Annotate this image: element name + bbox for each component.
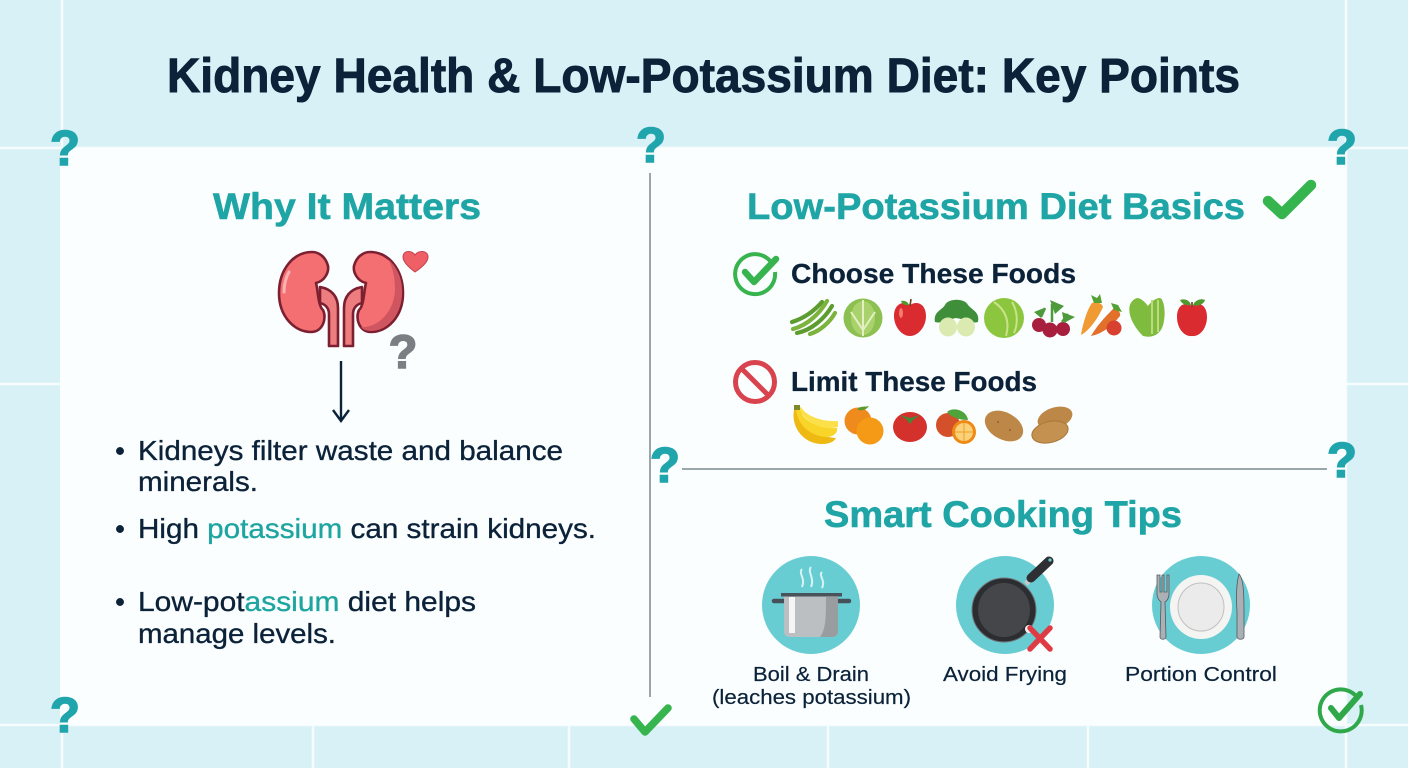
icon: large check <box>1268 185 1311 214</box>
icon: bottom center check <box>634 708 668 732</box>
icon: bottom right circled check <box>1320 689 1362 731</box>
icon: boiling pot <box>762 556 860 654</box>
icon: potato <box>980 404 1028 448</box>
horizontal divider <box>682 468 1327 470</box>
icon: grey question mark: ? <box>389 325 417 378</box>
heading: limit foods: Limit These Foods <box>791 366 1037 397</box>
icon: kidneys <box>279 252 403 346</box>
icon: heart <box>403 251 428 272</box>
icon: plate and cutlery <box>1152 556 1250 654</box>
text: boil and drain: Boil & Drain <box>753 663 869 686</box>
icon: apple 2 <box>1177 299 1207 336</box>
icon: bananas <box>794 405 838 444</box>
text: bullet list: manage levels. <box>138 618 336 649</box>
icon: teal question marks: ? <box>1327 434 1357 488</box>
text: bullet list <box>116 435 596 649</box>
icon: teal question marks <box>50 119 1357 743</box>
text: boil and drain: (leaches potassium) <box>712 686 911 709</box>
icon: teal question marks: ? <box>650 439 680 493</box>
icon: oranges <box>844 406 884 444</box>
icons: choose foods row <box>792 294 1207 338</box>
icon: teal question marks: ? <box>50 689 80 743</box>
panel: cooking tips <box>712 494 1277 709</box>
icon: tomato and orange slice <box>936 409 976 444</box>
panel: why it matters <box>116 186 596 649</box>
icon: frying pan <box>956 556 1054 654</box>
vertical divider <box>649 173 651 697</box>
heading: choose foods: Choose These Foods <box>791 258 1076 289</box>
icon: cabbage 2 <box>984 298 1024 338</box>
icon: teal question marks: ? <box>50 122 80 176</box>
panel: diet basics <box>735 185 1311 448</box>
icon: green beans <box>792 301 835 334</box>
text: avoid frying: Avoid Frying <box>943 663 1067 686</box>
panel: main white card <box>60 148 1346 725</box>
text: bullet list: Low-potassium diet helps <box>138 586 476 617</box>
icon: teal question marks: ? <box>636 119 666 173</box>
text: bullet list: Kidneys filter waste and balance <box>138 435 563 466</box>
icon: tomato <box>893 412 927 442</box>
heading: diet basics: Low-Potassium Diet Basics <box>747 186 1245 227</box>
heading: why it matters: Why It Matters <box>213 186 481 227</box>
icon: beets <box>1032 300 1075 338</box>
text: portion control: Portion Control <box>1125 663 1277 686</box>
icon: apple <box>894 299 926 336</box>
icon: cabbage <box>844 298 882 338</box>
text: boil and drain <box>712 663 911 709</box>
title: Kidney Health & Low-Potassium Diet: Key Points <box>167 50 1240 103</box>
icon: lettuce <box>1129 298 1165 337</box>
icon: carrots <box>1081 294 1122 336</box>
icon: no sign <box>736 362 774 402</box>
text: bullet list: minerals. <box>138 466 258 497</box>
arrow: down <box>333 361 349 421</box>
heading: cooking tips: Smart Cooking Tips <box>824 494 1182 535</box>
icons: limit foods row <box>794 402 1075 448</box>
icon: potatoes <box>1030 402 1075 447</box>
icon: bok choy <box>935 300 978 336</box>
icon: choose check <box>735 254 776 294</box>
icon: teal question marks: ? <box>1327 121 1357 175</box>
text: bullet list: High potassium can strain kidneys. <box>138 513 596 544</box>
